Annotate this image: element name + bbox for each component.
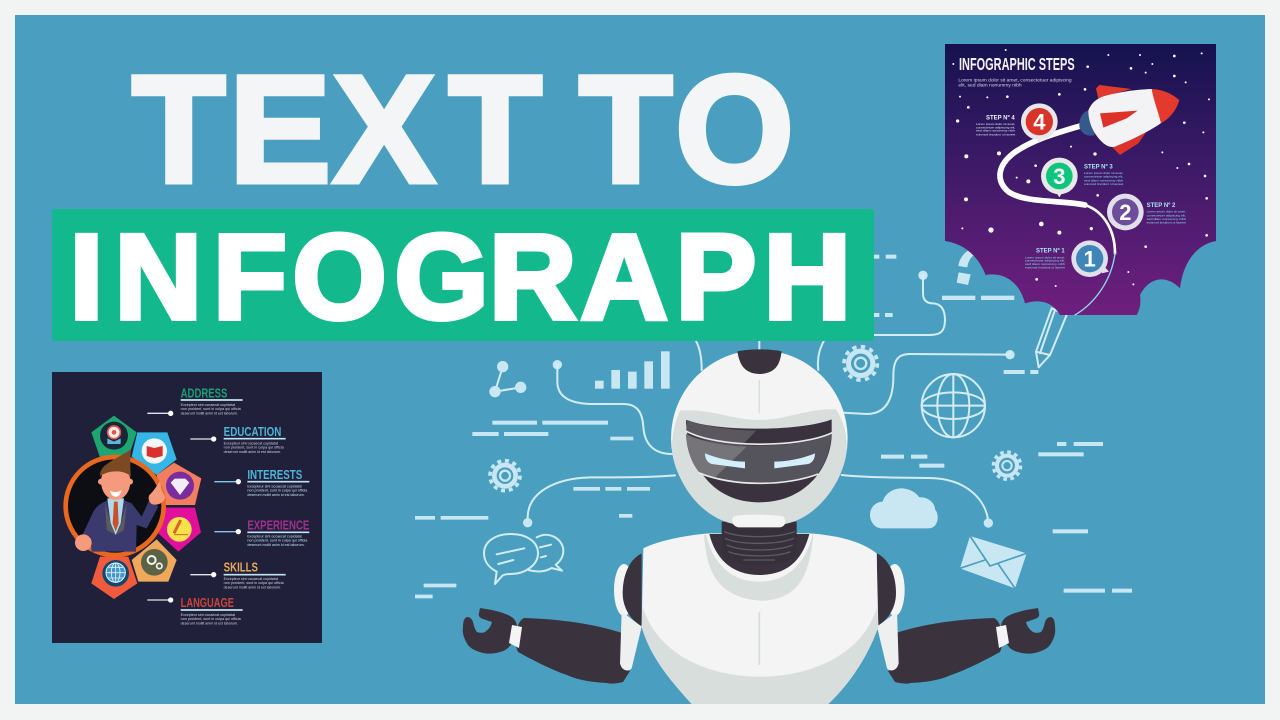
panel background xyxy=(52,372,322,643)
entry: interests: deserunt mollit anim id est laborum. xyxy=(247,493,305,497)
step 1 xyxy=(1025,240,1109,277)
step 2: STEP Nº 2 xyxy=(1147,203,1176,209)
entry: education: deserunt mollit anim id est laborum. xyxy=(224,450,281,454)
step 1: consectetuer adipiscing elit, xyxy=(1025,259,1065,263)
entry: address: deserunt mollit anim id est laborum. xyxy=(181,411,238,415)
rocket trail xyxy=(1000,126,1115,315)
robot torso xyxy=(642,533,878,704)
icon: small gear right xyxy=(993,452,1021,479)
entry: experience: Excepteur sint occaecat cupidatat xyxy=(247,535,302,539)
intro text xyxy=(958,77,1072,87)
step 4: 4 xyxy=(1033,110,1046,135)
step 4: sed diam nonummy nibh xyxy=(976,129,1016,133)
entry: address: non proident, sunt in culpa qui officia xyxy=(181,407,242,411)
step 4: consectetuer adipiscing elit, xyxy=(976,125,1016,129)
step 1: STEP Nº 1 xyxy=(1036,248,1065,254)
robot head xyxy=(671,349,848,527)
entry: experience: EXPERIENCE xyxy=(247,517,310,532)
entry: education: EDUCATION xyxy=(224,424,281,439)
circuit line to globe dot xyxy=(842,350,1015,414)
circuit line to mail xyxy=(842,475,993,528)
step 2 xyxy=(1107,194,1186,230)
title: TEXT TO: TEXT TO xyxy=(132,44,794,215)
entry: address xyxy=(147,385,243,416)
step 3: 3 xyxy=(1053,164,1065,189)
circuit line upper left xyxy=(553,360,672,454)
step 2: sed diam nonummy nibh xyxy=(1147,217,1186,221)
icon: gear upper xyxy=(844,347,877,380)
entry: skills: non proident, sunt in culpa qui officia xyxy=(224,581,285,585)
entry: experience: non proident, sunt in culpa qui officia xyxy=(247,539,308,543)
step 1: Lorem ipsum dolor sit amet, xyxy=(1025,255,1065,259)
panel: rocket infographic steps xyxy=(945,44,1216,315)
entry: experience: deserunt mollit anim id est laborum. xyxy=(247,543,305,547)
right circuit icons xyxy=(842,249,1132,593)
step 2: consectetuer adipiscing elit, xyxy=(1147,213,1186,217)
right shoulder xyxy=(877,553,905,670)
entry: education: non proident, sunt in culpa qui officia xyxy=(224,446,285,450)
icon: network nodes xyxy=(489,361,526,397)
entry: interests: Excepteur sint occaecat cupidatat xyxy=(247,485,302,489)
intro text: elit, sed diam nonummy nibh xyxy=(958,82,1022,87)
icon: envelope xyxy=(960,536,1027,588)
step 4 xyxy=(976,103,1058,143)
step 2: euismod tincidunt ut laoreet xyxy=(1147,221,1186,225)
icon: globe xyxy=(922,374,985,437)
entry: education: Excepteur sint occaecat cupidatat xyxy=(224,442,278,446)
entry: skills xyxy=(190,560,286,589)
entry: language xyxy=(147,595,243,625)
stars xyxy=(952,49,1210,287)
hexagon salmon interests xyxy=(157,463,201,505)
text dashes left xyxy=(415,421,650,598)
step 1: euismod tincidunt ut laoreet xyxy=(1025,266,1065,270)
entry: language: non proident, sunt in culpa qui officia xyxy=(181,617,242,621)
step 2: Lorem ipsum dolor sit amet, xyxy=(1147,210,1186,214)
title banner: INFOGRAPH: INFOGRAPH xyxy=(70,208,851,344)
step 1: 1 xyxy=(1084,247,1096,272)
icon: rocket xyxy=(1079,85,1179,155)
robot neck and collar xyxy=(709,522,809,575)
icon: chat bubbles xyxy=(484,534,563,584)
entry: address: ADDRESS xyxy=(181,385,228,400)
intro text: Lorem ipsum dolor sit amet, consectetuer adipiscing xyxy=(958,77,1072,82)
entry: interests: INTERESTS xyxy=(247,467,303,482)
entry: address: Excepteur sint occaecat cupidatat xyxy=(181,403,235,407)
step 3: Lorem ipsum dolor sit amet, xyxy=(1084,171,1124,175)
robot top wires xyxy=(693,336,827,370)
entry: skills: SKILLS xyxy=(224,560,258,575)
icon: cloud xyxy=(870,488,938,528)
robot xyxy=(463,336,1055,704)
robot visor xyxy=(685,419,832,502)
entry: skills: Excepteur sint occaecat cupidatat xyxy=(224,577,278,581)
heading: INFOGRAPHIC STEPS xyxy=(959,54,1075,74)
step 3: sed diam nonummy nibh xyxy=(1084,178,1124,182)
entry: skills: deserunt mollit anim id est laborum. xyxy=(224,585,281,589)
circuit line upper right xyxy=(870,271,945,335)
icon: exclamation mark xyxy=(957,249,975,285)
person in ring xyxy=(66,449,165,555)
step 3: euismod tincidunt ut laoreet xyxy=(1084,182,1124,186)
text dashes right xyxy=(873,255,1132,593)
entry: education xyxy=(190,424,286,454)
hexagon tan skills xyxy=(132,539,177,582)
hexagon magenta experience xyxy=(158,508,201,552)
bar chart icon xyxy=(595,351,670,389)
step 3 xyxy=(1041,158,1124,197)
step 3: consectetuer adipiscing elit, xyxy=(1084,175,1124,179)
step 2: 2 xyxy=(1119,200,1131,225)
entry: language: deserunt mollit anim id est laborum. xyxy=(181,621,238,625)
step 4: euismod tincidunt ut laoreet xyxy=(976,132,1016,136)
step 3: STEP Nº 3 xyxy=(1084,164,1113,170)
icon: pencil xyxy=(1036,308,1067,367)
panel background xyxy=(945,44,1216,315)
entry: language: LANGUAGE xyxy=(181,595,234,610)
circuit line to chat xyxy=(523,475,675,527)
left circuit icons xyxy=(415,351,675,598)
step 4: Lorem ipsum dolor sit amet, xyxy=(976,122,1016,126)
entry: interests: non proident, sunt in culpa qui officia xyxy=(247,489,308,493)
robot right arm xyxy=(888,608,1055,684)
hexagon green address xyxy=(91,416,137,457)
entry: language: Excepteur sint occaecat cupidatat xyxy=(181,613,235,617)
robot left arm xyxy=(463,608,630,684)
step 4: STEP Nº 4 xyxy=(986,115,1015,121)
panel: resume infographic xyxy=(52,372,322,643)
hexagon red language xyxy=(91,557,137,599)
step 1: sed diam nonummy nibh xyxy=(1025,262,1065,266)
left shoulder xyxy=(614,553,642,670)
entry: experience xyxy=(214,517,310,547)
hexagon blue education xyxy=(132,432,177,475)
entry: interests xyxy=(214,467,309,497)
icon: gear left xyxy=(490,461,520,491)
